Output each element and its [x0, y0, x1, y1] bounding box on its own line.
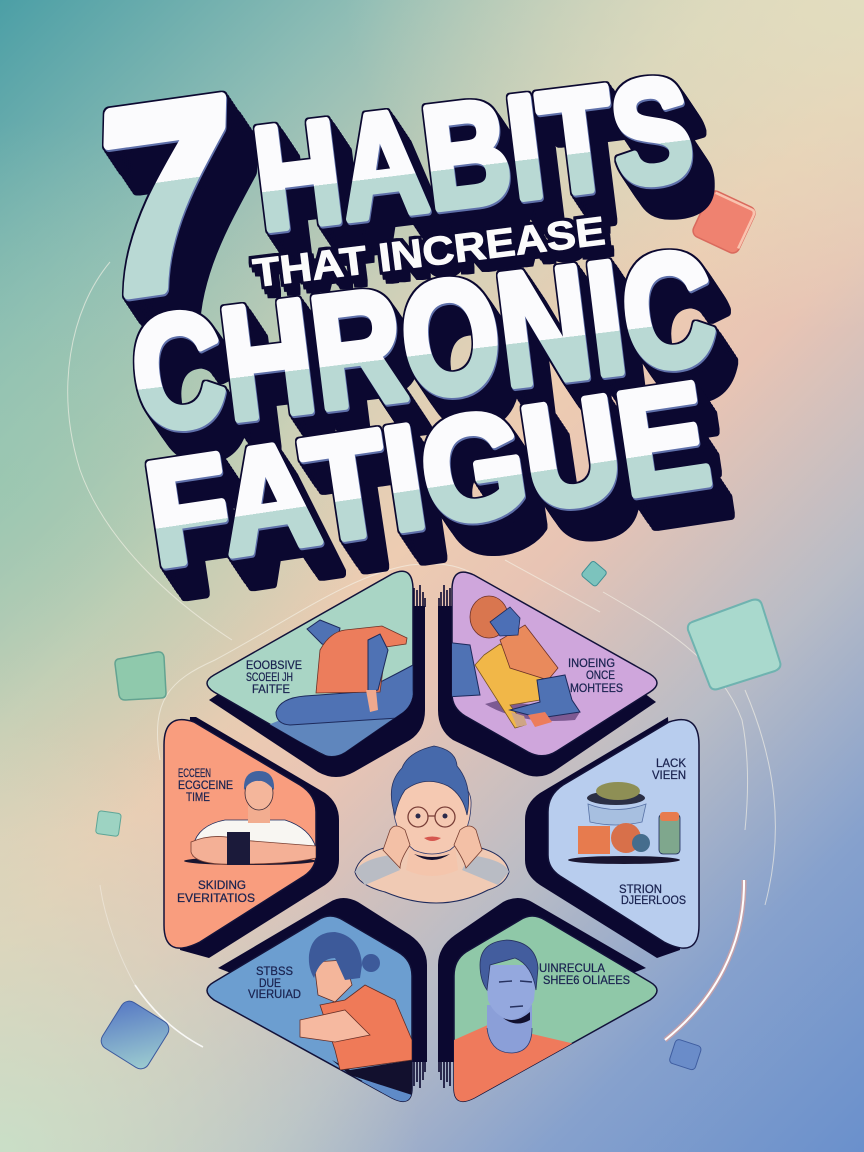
- label: ONCE: [586, 668, 615, 682]
- icon: green cube: [115, 652, 166, 700]
- panel: stress overload: [207, 916, 412, 1110]
- illustration: person slumped in yellow sweater: [445, 596, 580, 728]
- title: FATIGUE: FATIGUE: [136, 352, 719, 598]
- icon: small mint cube: [95, 811, 121, 837]
- label: [619, 756, 686, 907]
- panel: coral screen time: [164, 720, 316, 948]
- title: THAT INCREASE: THAT INCREASE: [251, 209, 607, 296]
- label: SHEE6 OLIAEES: [543, 973, 630, 987]
- title: HABITS: HABITS: [246, 46, 701, 261]
- illustration: slumped person on bed: [268, 620, 413, 760]
- icon: small teal cube: [581, 560, 607, 587]
- label: FAITFE: [252, 682, 290, 696]
- illustration: woman bending over: [300, 932, 412, 1110]
- label: STBSS: [256, 964, 293, 978]
- label: UINRECULA: [539, 961, 605, 975]
- label: ECGCEINE: [178, 778, 233, 792]
- label: DJEERLOOS: [621, 893, 686, 907]
- label: SKIDING: [198, 878, 246, 892]
- panel backing shadows: [180, 606, 680, 1062]
- glowing arc left: [100, 885, 203, 1047]
- label: [539, 961, 630, 987]
- label: EVERITATIOS: [177, 891, 255, 905]
- illustration: young man portrait: [454, 940, 575, 1105]
- label: [177, 766, 255, 905]
- icon: small blue cube: [669, 1039, 702, 1071]
- panel: lilac sleep habit: [445, 572, 657, 756]
- panel: excessive screen fatigue: [207, 571, 413, 760]
- label: TIME: [186, 790, 210, 804]
- label: MOHTEES: [570, 681, 623, 695]
- label: DUE: [259, 976, 281, 990]
- center illustration: woman with glasses: [355, 746, 509, 903]
- icon: coral cube: [691, 189, 757, 255]
- illustration: food on table: [568, 782, 680, 864]
- panel: blue nutrition: [548, 720, 699, 948]
- label: LACK: [656, 756, 686, 770]
- label: INOEING: [568, 656, 615, 670]
- icon: blue gradient cube: [98, 998, 172, 1072]
- panel: irregular schedules: [454, 916, 657, 1105]
- label: STRION: [619, 882, 662, 896]
- label: [568, 656, 623, 695]
- streaked ends of the shadows: [414, 585, 450, 1088]
- label: VIEEN: [652, 768, 686, 782]
- thin decorative curves: [68, 262, 775, 905]
- icon: big mint cube: [688, 600, 780, 689]
- glowing arc right: [665, 880, 744, 1040]
- label: ECCEEN: [178, 766, 211, 780]
- label: SCOEEI JH: [246, 670, 293, 684]
- label: [246, 658, 302, 696]
- title: CHRONIC: CHRONIC: [122, 216, 724, 465]
- label: EOOBSIVE: [246, 658, 302, 672]
- title: 7: 7: [94, 39, 233, 354]
- label: VIERUIAD: [248, 987, 301, 1001]
- label: [248, 964, 301, 1001]
- illustration: man with arms crossed: [184, 771, 316, 865]
